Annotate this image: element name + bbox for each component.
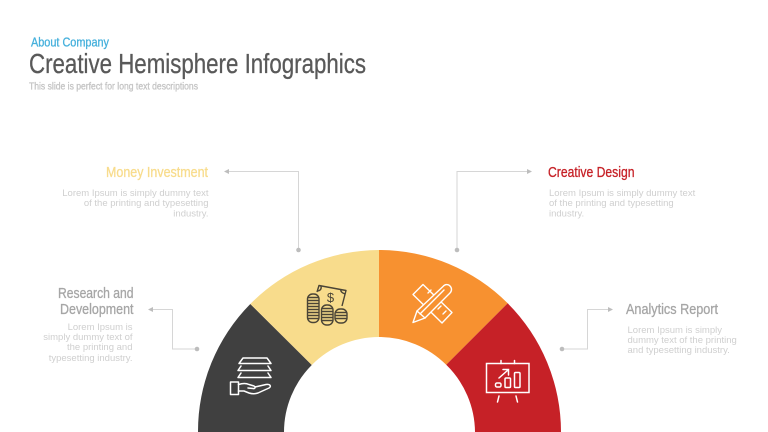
callout: research and development: Development <box>60 302 134 318</box>
subtitle: This slide is perfect for long text descriptions <box>29 82 198 92</box>
callout: research and development <box>43 286 199 364</box>
callout: creative design <box>455 165 696 252</box>
segment: analytics <box>446 303 561 432</box>
text: of the printing and typesetting <box>84 198 208 209</box>
icon: presentation board <box>486 360 529 402</box>
icon: pencil and ruler <box>413 284 452 323</box>
text: Lorem Ipsum is <box>68 322 133 333</box>
hemisphere chart <box>198 250 561 432</box>
text <box>43 322 133 364</box>
connector <box>148 307 199 351</box>
title: Creative Hemisphere Infographics <box>29 48 366 79</box>
heading: Analytics Report <box>626 302 718 318</box>
segment: creative <box>379 250 508 365</box>
text: Lorem Ipsum is simply dummy text <box>62 188 209 199</box>
icon: coins and banknote <box>308 286 347 325</box>
text: dummy text of the printing <box>628 335 737 346</box>
text: of the printing and typesetting <box>549 198 674 209</box>
icon: hand with stack <box>230 358 271 394</box>
callout: analytics report <box>560 302 737 356</box>
text: industry. <box>549 208 584 220</box>
text: Lorem Ipsum is simply dummy text <box>549 188 696 199</box>
icon: coins and banknote: $ <box>327 290 335 305</box>
header <box>29 36 366 92</box>
callout: money investment <box>62 165 301 252</box>
text: the printing and <box>67 342 132 353</box>
segment: money <box>250 250 379 365</box>
text: simply dummy text of <box>43 332 133 343</box>
heading: Research and <box>58 286 134 302</box>
text: typesetting industry. <box>49 353 132 364</box>
heading: Creative Design <box>548 165 634 181</box>
text: industry. <box>173 208 208 220</box>
eyebrow: About Company <box>31 36 110 50</box>
segment: research <box>198 304 312 432</box>
text <box>628 325 737 356</box>
connector <box>455 169 532 252</box>
text <box>62 188 209 220</box>
connector <box>224 169 301 252</box>
heading: Money Investment <box>106 165 208 181</box>
connector <box>560 307 613 351</box>
text <box>549 188 696 220</box>
text: Lorem Ipsum is simply <box>628 325 722 336</box>
text: and typesetting industry. <box>628 345 730 356</box>
